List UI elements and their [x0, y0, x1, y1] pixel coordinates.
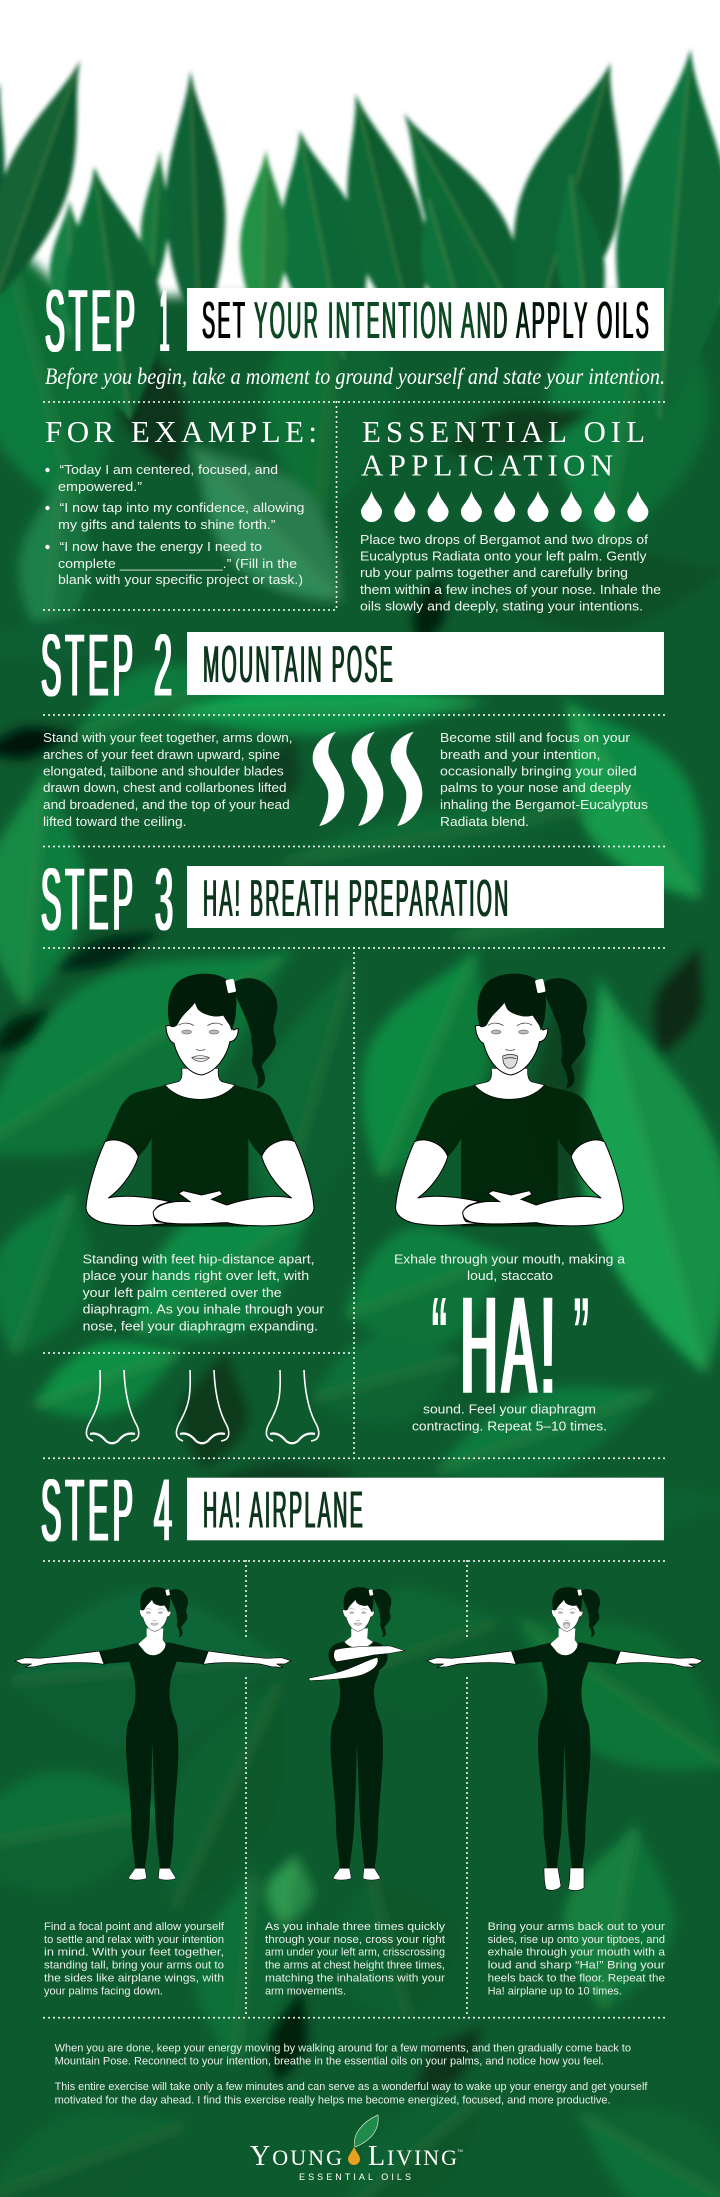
text: inhale instructions: diaphragm. As you inhale through your	[83, 1302, 325, 1316]
panel: for example: complete _____________.” (Fill in the	[58, 556, 297, 571]
text: airplane column 3: loud and sharp “Ha!” Bring your	[488, 1960, 665, 1972]
logo: young living: YOUNG	[250, 2141, 342, 2172]
text: exhale instructions: ”	[572, 1278, 591, 1385]
panel: for example: my gifts and talents to shine forth.”	[58, 517, 276, 532]
text: airplane column 3: heels back to the floor. Repeat the	[488, 1973, 665, 1985]
text: inhale instructions: your left palm centered over the	[83, 1285, 282, 1300]
heading: step 1	[45, 271, 664, 370]
text: inhale instructions: Standing with feet hip-distance apart,	[83, 1252, 315, 1266]
panel: for example: “Today I am centered, focused, and	[60, 462, 278, 477]
text: mountain pose right: palms to your nose and deeply	[440, 780, 631, 795]
text: airplane column 2: arm movements.	[265, 1985, 346, 1997]
text: airplane column 1: Find a focal point and allow yourself	[44, 1921, 225, 1933]
text: mountain pose right: occasionally bringing your oiled	[440, 764, 637, 778]
panel: essential oil application: ESSENTIAL OIL	[362, 414, 645, 449]
text: mountain pose left: lifted toward the ceiling.	[43, 814, 186, 829]
panel: essential oil application: rub your palms together and carefully bring	[360, 565, 628, 580]
text: airplane column 3	[488, 1921, 666, 1997]
figure: inhale bust	[86, 974, 314, 1227]
text: mountain pose left: drawn down, chest and collarbones lifted	[43, 780, 286, 795]
text: mountain pose right	[440, 730, 648, 829]
logo: young living: LIVING	[368, 2141, 457, 2172]
heading: step 4	[41, 1461, 664, 1560]
figure: tiptoes	[427, 1587, 703, 1890]
heading: step 2: STEP	[41, 616, 137, 714]
dividers: step 3	[44, 948, 666, 1458]
panel: essential oil application: them within a few inches of your nose. Inhale the	[360, 582, 661, 597]
text: airplane column 2	[265, 1921, 446, 1997]
icon: three noses	[86, 1370, 319, 1443]
panel: for example: “I now tap into my confidence, allowing	[60, 500, 304, 515]
panel: for example: FOR EXAMPLE:	[45, 414, 317, 449]
heading: step 3	[41, 849, 664, 948]
text: closing notes: motivated for the day ahead. I find this exercise really helps me become energized, focused, and more productive.	[55, 2094, 611, 2106]
heading: step 3: 3	[155, 849, 173, 948]
text: airplane column 2: through your nose, cross your right	[265, 1934, 445, 1946]
dividers: step 4	[44, 1561, 666, 2018]
text: airplane column 2: matching the inhalations with your	[265, 1973, 445, 1985]
panel: essential oil application: oils slowly and deeply, stating your intentions.	[360, 598, 643, 614]
text: airplane column 1: the sides like airplane wings, with	[44, 1973, 224, 1985]
text: exhale instructions: sound. Feel your diaphragm	[423, 1402, 596, 1416]
text: mountain pose left: Stand with your feet together, arms down,	[43, 730, 292, 745]
text: airplane column 1: in mind. With your feet together,	[44, 1947, 224, 1959]
text: airplane column 1: to settle and relax with your intention	[44, 1934, 224, 1946]
text: inhale instructions	[83, 1252, 325, 1334]
big HA!: “	[430, 1278, 449, 1385]
text: airplane column 2: arm under your left arm, crisscrossing	[265, 1947, 445, 1959]
text: airplane column 1	[44, 1921, 225, 1997]
heading: step 2	[41, 616, 664, 714]
background: leaf tips at top	[0, 44, 720, 426]
heading: step 4: HA! AIRPLANE	[203, 1481, 365, 1539]
panel: for example: blank with your specific project or task.)	[58, 572, 303, 587]
heading: step 1: 1	[160, 271, 169, 370]
logo: young living	[250, 2115, 463, 2182]
text: airplane column 2: the arms at chest height three times,	[265, 1960, 445, 1972]
text: mountain pose right: Become still and focus on your	[440, 730, 631, 745]
text: mountain pose left: and broadened, and the top of your head	[43, 797, 290, 812]
big HA!	[430, 1269, 591, 1423]
icon: aroma waves	[313, 732, 422, 826]
panel: for example	[45, 414, 317, 587]
text: airplane column 3: Ha! airplane up to 10 times.	[488, 1985, 622, 1997]
logo: young living: TM	[457, 2148, 463, 2153]
panel: essential oil application: Eucalyptus Radiata onto your left palm. Gently	[360, 548, 647, 564]
figure: arms out	[15, 1587, 291, 1880]
panel: essential oil application: APPLICATION	[361, 448, 613, 482]
text: exhale instructions: contracting. Repeat 5–10 times.	[412, 1418, 607, 1434]
text: mountain pose right: inhaling the Bergamot-Eucalyptus	[440, 797, 648, 812]
text: closing notes: Mountain Pose. Reconnect to your intention, breathe in the essential oils on your palms, and notice how you feel.	[55, 2056, 604, 2068]
panel: for example: empowered.”	[58, 479, 142, 494]
text: mountain pose left	[43, 730, 292, 829]
logo: young living: ESSENTIAL OILS	[299, 2172, 411, 2182]
panel: essential oil application	[360, 414, 661, 614]
dividers: step 1	[44, 402, 666, 610]
text: airplane column 1: your palms facing down.	[44, 1985, 163, 1997]
figure: exhale bust	[395, 974, 623, 1227]
text: inhale instructions: nose, feel your diaphragm expanding.	[83, 1318, 318, 1334]
panel: essential oil application: Place two drops of Bergamot and two drops of	[360, 532, 648, 547]
text: airplane column 1: standing tall, bring your arms out to	[44, 1960, 224, 1972]
figure: arms crossed	[308, 1587, 405, 1880]
panel: for example: “I now have the energy I need to	[60, 539, 262, 554]
divider lines: step 2	[44, 715, 666, 846]
heading: step 4: STEP	[41, 1461, 137, 1560]
heading: step 3: STEP	[41, 849, 137, 948]
text: mountain pose right: Radiata blend.	[440, 814, 529, 829]
text: airplane column 3: sides, rise up onto your tiptoes, and	[488, 1934, 665, 1946]
icon: nine oil drops	[361, 491, 648, 522]
text: airplane column 2: As you inhale three times quickly	[265, 1921, 446, 1933]
text: exhale instructions: loud, staccato	[467, 1268, 553, 1283]
text: mountain pose left: arches of your feet drawn upward, spine	[43, 747, 280, 762]
text: exhale instructions	[394, 1252, 626, 1434]
heading: step 2: MOUNTAIN POSE	[203, 636, 395, 694]
heading: step 1: STEP	[45, 271, 139, 370]
text: closing notes: This entire exercise will take only a few minutes and can serve as a wonderful way to wake up your energy and get yourself	[55, 2081, 648, 2093]
text: airplane column 3: exhale through your mouth with a	[488, 1947, 666, 1959]
text: airplane column 3: Bring your arms back out to your	[488, 1921, 665, 1933]
text: closing notes	[55, 2043, 648, 2106]
text: exhale instructions: Exhale through your mouth, making a	[394, 1252, 626, 1266]
heading: step 4: 4	[154, 1461, 172, 1560]
text: mountain pose right: breath and your intention,	[440, 747, 600, 762]
text: closing notes: When you are done, keep your energy moving by walking around for a few moments, and then gradually come back to	[55, 2043, 631, 2055]
text: mountain pose left: elongated, tailbone and shoulder blades	[43, 764, 284, 778]
heading: step 2: 2	[154, 616, 172, 714]
text: inhale instructions: place your hands right over left, with	[83, 1268, 309, 1283]
